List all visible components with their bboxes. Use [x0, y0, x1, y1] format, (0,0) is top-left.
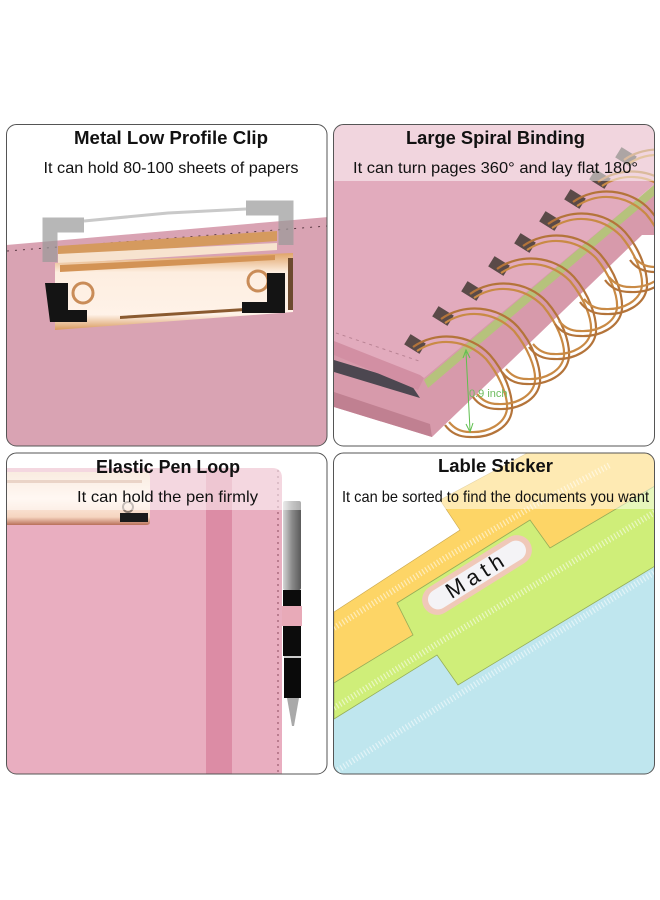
heading: label sticker: Lable Sticker	[438, 455, 553, 476]
yellow divider	[334, 450, 660, 683]
clipboard cover	[6, 217, 328, 447]
panel: label sticker	[333, 450, 660, 775]
header band	[333, 124, 655, 181]
paper edge	[424, 184, 655, 388]
icon: open metal clip	[45, 208, 293, 330]
panel border	[334, 453, 654, 774]
front cover	[333, 120, 655, 388]
header band	[440, 454, 654, 509]
panel: large spiral binding	[333, 120, 660, 447]
elastic band	[206, 468, 232, 775]
dimension arrow	[463, 350, 473, 432]
spiral rings	[404, 147, 660, 437]
text: dimension label: 0.9 inch	[469, 388, 508, 400]
panel: metal low profile clip	[7, 200, 326, 446]
back cover	[334, 190, 655, 437]
panel border	[334, 124, 654, 446]
green divider	[334, 483, 660, 719]
perforated strips	[334, 465, 655, 770]
text: clip description: It can hold 80-100 sheets of papers	[44, 160, 298, 177]
panel: elastic pen loop	[7, 468, 302, 774]
heading: large spiral binding: Large Spiral Binding	[406, 127, 585, 148]
panel border	[6, 124, 327, 446]
heading: metal low profile clip: Metal Low Profile Clip	[74, 127, 268, 148]
text: spiral description: It can turn pages 360° and lay flat 180°	[353, 160, 638, 177]
metal clip	[6, 472, 150, 525]
heading: elastic pen loop: Elastic Pen Loop	[96, 456, 240, 477]
panel border	[6, 453, 327, 774]
clipboard cover	[6, 468, 282, 775]
white header band	[6, 124, 328, 181]
text: math label: Math	[441, 546, 513, 603]
label pill	[422, 535, 532, 615]
text: pen loop description: It can hold the pen firmly	[77, 489, 258, 506]
header band	[7, 468, 301, 510]
white corner	[334, 454, 526, 612]
pen	[282, 501, 302, 726]
